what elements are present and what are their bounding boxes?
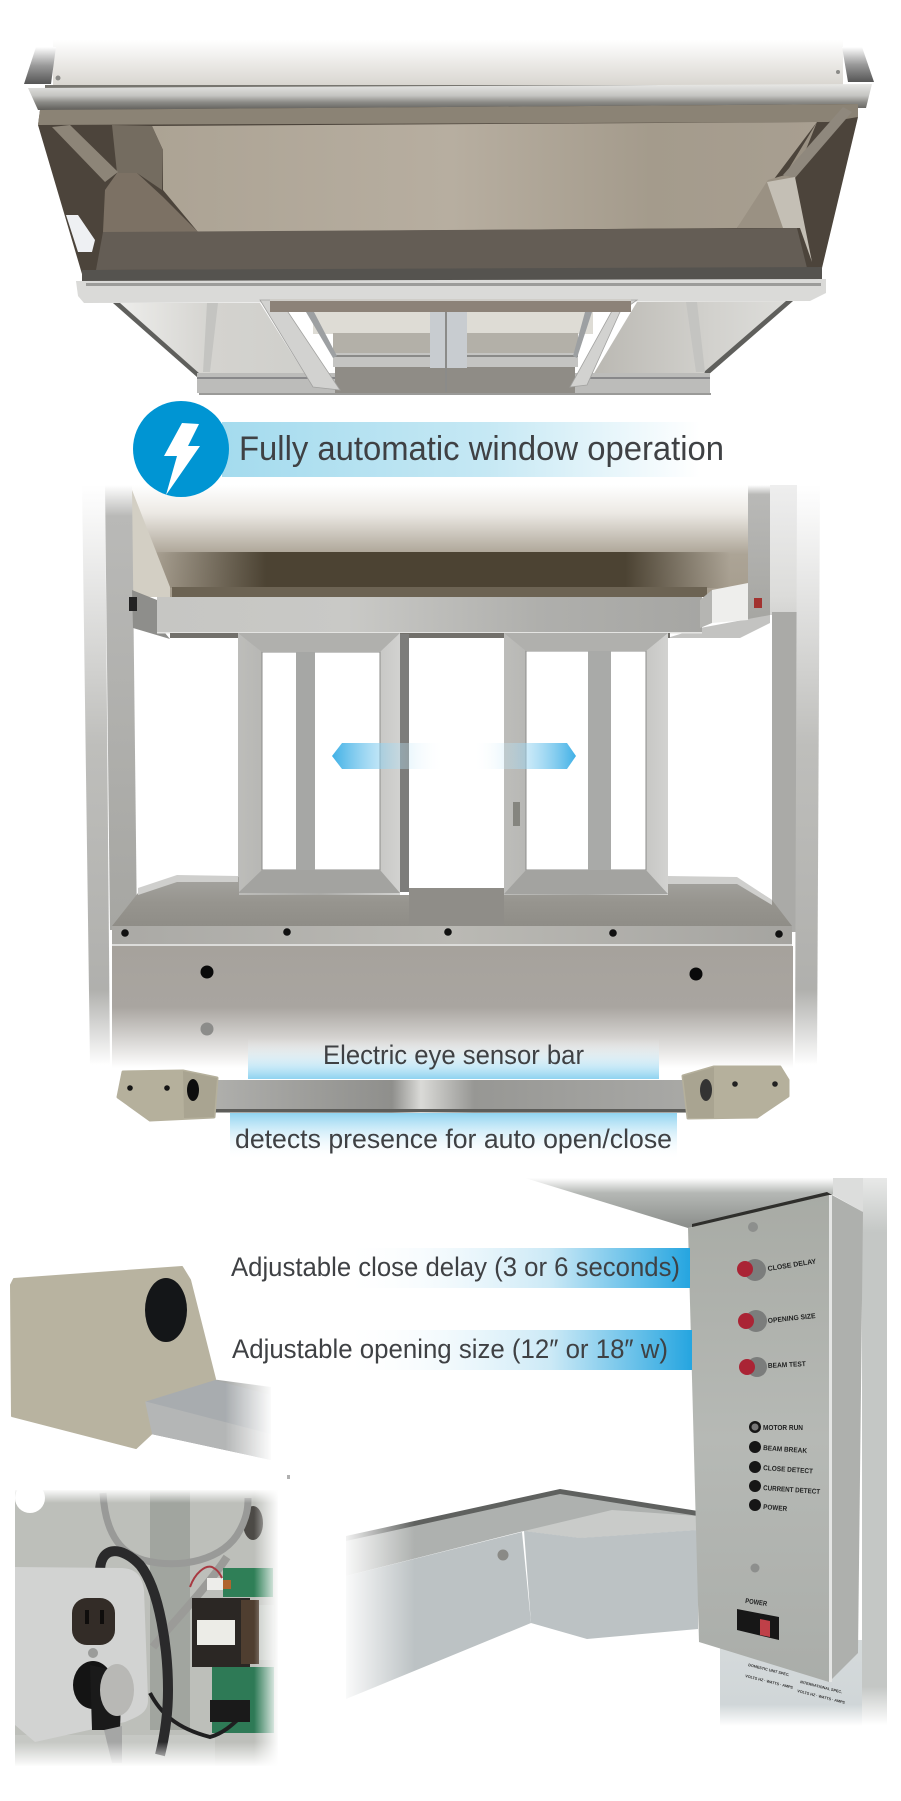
- spec plate text: VOLTS HZ · WATTS · AMPS: [745, 1674, 794, 1690]
- spec plate text: [745, 1663, 846, 1705]
- lower dark band: [96, 228, 807, 270]
- right outer post: [795, 485, 820, 1065]
- right inner post: [772, 612, 797, 932]
- left bracket: [132, 590, 170, 639]
- speck: [287, 1475, 290, 1479]
- background: [15, 1490, 278, 1766]
- right window stile: [767, 177, 812, 262]
- arrow: sash opening left: [332, 743, 445, 769]
- hood interior base: [132, 485, 750, 597]
- label: detects presence: [230, 1113, 677, 1160]
- indicator lights: POWER: [763, 1504, 787, 1513]
- left side stile: [203, 303, 218, 372]
- outlet: [72, 1598, 115, 1645]
- indicator lights: BEAM BREAK: [763, 1445, 807, 1455]
- white control box: [712, 583, 748, 623]
- left top post: [24, 47, 56, 84]
- photo: close-up of sensor housing: [11, 1267, 273, 1465]
- photo: control panel on hood post: [340, 1178, 887, 1726]
- right side stile: [686, 302, 705, 372]
- screws: [56, 70, 840, 80]
- post right edge: [862, 1178, 887, 1725]
- icon: lightning bolt badge: [133, 401, 229, 497]
- callout: adjustable close delay: Adjustable close delay (3 or 6 seconds): [231, 1252, 680, 1282]
- hood dark underside: [150, 552, 730, 588]
- label: detects presence: detects presence for auto open/close: [235, 1124, 672, 1154]
- callout: adjustable opening size: Adjustable opening size (12″ or 18″ w): [232, 1334, 668, 1364]
- indicator lights: MOTOR RUN: [763, 1425, 803, 1432]
- control panel left: [112, 125, 163, 190]
- terminal block: [210, 1700, 250, 1722]
- inner far wall: [313, 312, 593, 334]
- upper circuit board: [223, 1568, 273, 1597]
- left angled sash: [260, 300, 340, 390]
- power switch: POWER: [745, 1598, 767, 1608]
- button: opening size: [738, 1310, 816, 1332]
- panel holes: [200, 966, 702, 1036]
- bottom rail: [76, 279, 826, 303]
- right inner wall: [737, 122, 817, 228]
- window sill bottom line: [199, 393, 711, 395]
- label: electric eye sensor bar: [248, 1038, 659, 1079]
- photo: wiring and outlet inside enclosure: [14, 1483, 280, 1767]
- arrow: sash opening right: [473, 743, 576, 769]
- centre stiles: [430, 312, 467, 368]
- left sash: [238, 633, 400, 895]
- heading text: Fully automatic window operation: [239, 430, 724, 468]
- underside beam: [525, 1178, 860, 1228]
- button: opening size: OPENING SIZE: [767, 1313, 816, 1325]
- screws: [748, 1222, 760, 1572]
- valance underside: [170, 633, 670, 638]
- valance bar: [157, 597, 702, 633]
- edge fades: [14, 1489, 280, 1503]
- left outer post: [82, 485, 110, 1065]
- button: beam test: [739, 1357, 807, 1377]
- bar stub: [144, 1379, 271, 1460]
- photo: sensor bar: [118, 1067, 788, 1120]
- indicator lights: CLOSE DETECT: [763, 1465, 814, 1476]
- black cable: [100, 1551, 168, 1755]
- counter top: [112, 877, 792, 926]
- plate screw: [88, 1648, 98, 1658]
- edge holes: [121, 928, 783, 938]
- outlet box: [15, 1567, 148, 1742]
- right diagonal stile: [783, 107, 852, 178]
- timer switch: [73, 1661, 134, 1763]
- lower work surface rail: [340, 1485, 698, 1705]
- lower panel: [112, 946, 793, 1068]
- indicator lights: [749, 1421, 821, 1513]
- photo: front view of hood with sliding sashes: [82, 485, 820, 1068]
- spec plate text: DOMESTIC UNIT SPEC.: [748, 1663, 790, 1677]
- right bracket: [667, 615, 770, 638]
- inner sill: [333, 353, 578, 367]
- counter rear rim: [138, 875, 238, 895]
- center floor: [335, 367, 575, 393]
- transformer: [192, 1598, 250, 1667]
- bottom dark strip: [82, 267, 822, 282]
- counter front edge: [112, 926, 792, 945]
- lens: [145, 1278, 187, 1342]
- top panel: [53, 40, 843, 86]
- grey cables: [103, 1493, 248, 1564]
- power switch: [737, 1598, 779, 1640]
- indicator lights: CURRENT DETECT: [763, 1485, 821, 1496]
- right top post: [842, 47, 874, 82]
- right strip: [748, 485, 770, 620]
- button: close delay: CLOSE DELAY: [767, 1258, 817, 1273]
- lower circuit board: [212, 1667, 274, 1733]
- post plate: [720, 1640, 862, 1726]
- label: electric eye sensor bar: Electric eye sensor bar: [323, 1040, 584, 1070]
- photo: fume hood with window from below: [24, 40, 874, 395]
- banner: fully automatic window operation: [133, 401, 724, 497]
- button: close delay: [737, 1258, 817, 1281]
- left sensor cap: [118, 1071, 217, 1120]
- spec plate text: INTERNATIONAL SPEC.: [800, 1680, 843, 1694]
- counter back gap: [409, 888, 504, 926]
- thin black cable: [150, 1693, 245, 1737]
- right sash: [504, 633, 668, 895]
- lower right window: [587, 301, 793, 385]
- latch: [513, 802, 520, 826]
- right sensor cap: [683, 1067, 788, 1118]
- knob: [243, 1506, 263, 1540]
- center stile: [400, 634, 409, 892]
- top glass band: [38, 104, 858, 125]
- button: beam test: BEAM TEST: [768, 1361, 807, 1370]
- left inner stile: [52, 125, 118, 182]
- dark rail line: [45, 85, 851, 88]
- housing: [11, 1267, 215, 1448]
- smoked glass body: [38, 104, 858, 274]
- left floor corner: [103, 173, 198, 232]
- panel side: [829, 1195, 863, 1682]
- upper rail: [28, 84, 872, 110]
- sash header bar: [270, 300, 631, 312]
- right white panel: [770, 485, 797, 615]
- bar: [208, 1080, 692, 1113]
- lower rails: [197, 373, 342, 393]
- right angled sash: [570, 300, 637, 387]
- spec plate text: VOLTS HZ · WATTS · AMPS: [797, 1689, 846, 1705]
- white reflection: [66, 215, 95, 252]
- lower left window: [113, 303, 313, 387]
- panel face: [688, 1195, 829, 1682]
- back wall: [152, 122, 817, 232]
- left wedge: [132, 490, 170, 597]
- left inner post: [105, 485, 137, 930]
- banner band: [222, 422, 700, 477]
